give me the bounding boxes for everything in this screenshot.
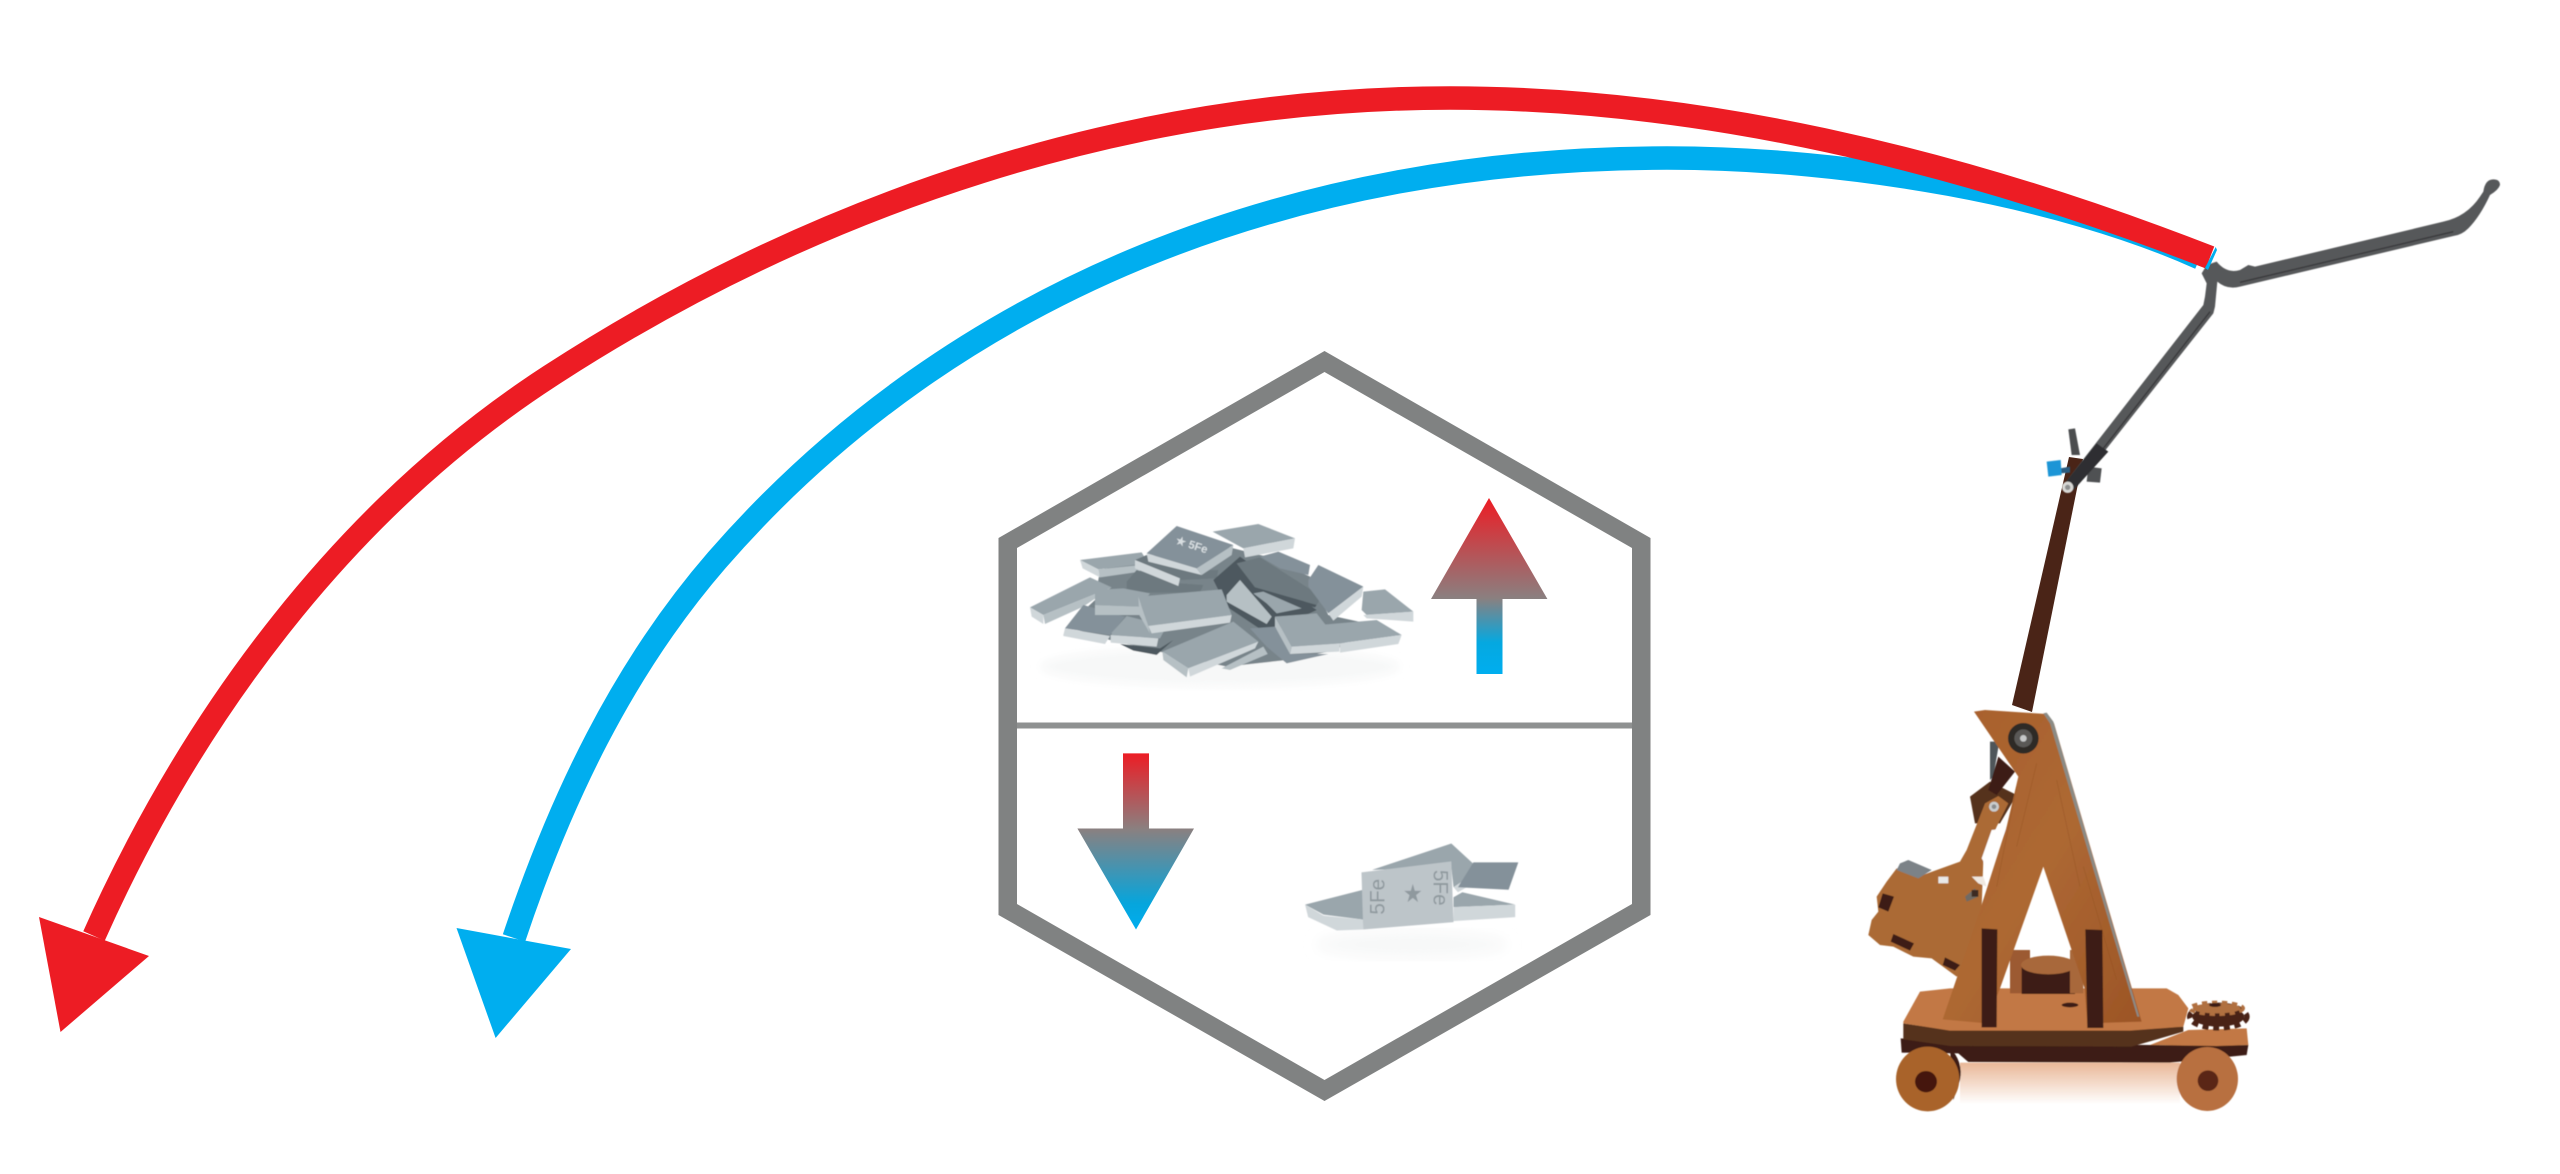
- arm clamp and blue knob: [2047, 428, 2102, 483]
- bucket lattice openings: [1938, 828, 2007, 902]
- back link behind frame: [1970, 782, 2017, 823]
- wooden throwing arm: [2012, 457, 2083, 712]
- gear: [2190, 1002, 2247, 1028]
- arrow: long-range red trajectory: [39, 98, 2210, 1032]
- hexagon panel: counterweight mass comparison: [998, 351, 1650, 1101]
- pivot bearing: [2008, 723, 2039, 754]
- arrow origin overlay: [2205, 247, 2217, 270]
- icon: up arrow, more weight: [1431, 498, 1547, 674]
- frame grain: [1997, 763, 2117, 980]
- bucket slots: [1878, 893, 1960, 971]
- counterweight disc: [2010, 950, 2030, 993]
- ground shadow: [1960, 1063, 2180, 1104]
- catapult body: [1868, 710, 2248, 1111]
- embossed marks on front weight: [1366, 870, 1452, 915]
- uprights: [1982, 928, 2103, 1028]
- small pile of metal weights: [1305, 843, 1518, 958]
- chassis upper plate: [1903, 1023, 2183, 1047]
- icon: down arrow, less weight: [1077, 753, 1194, 930]
- catapult model: [1868, 179, 2500, 1111]
- wheels: [1896, 1047, 2238, 1111]
- embossed marks on weights: ★ 5Fe: [1174, 535, 1209, 556]
- divider line: [1017, 722, 1632, 728]
- bucket: [1868, 796, 2008, 977]
- metal arm and sling: [2047, 179, 2500, 493]
- embossed marks on front weight: ★: [1403, 880, 1423, 907]
- arrow: short-range blue trajectory: [456, 158, 2200, 1038]
- embossed marks on front weight: 5Fe: [1366, 879, 1389, 915]
- chassis lower plate: [2150, 1028, 2248, 1047]
- large pile of metal weights: [1030, 524, 1413, 687]
- embossed marks on front weight: 5Fe: [1429, 870, 1452, 906]
- screw: [1989, 802, 1999, 812]
- A-frame: [1943, 710, 2142, 1023]
- hexagon frame: [998, 351, 1650, 1101]
